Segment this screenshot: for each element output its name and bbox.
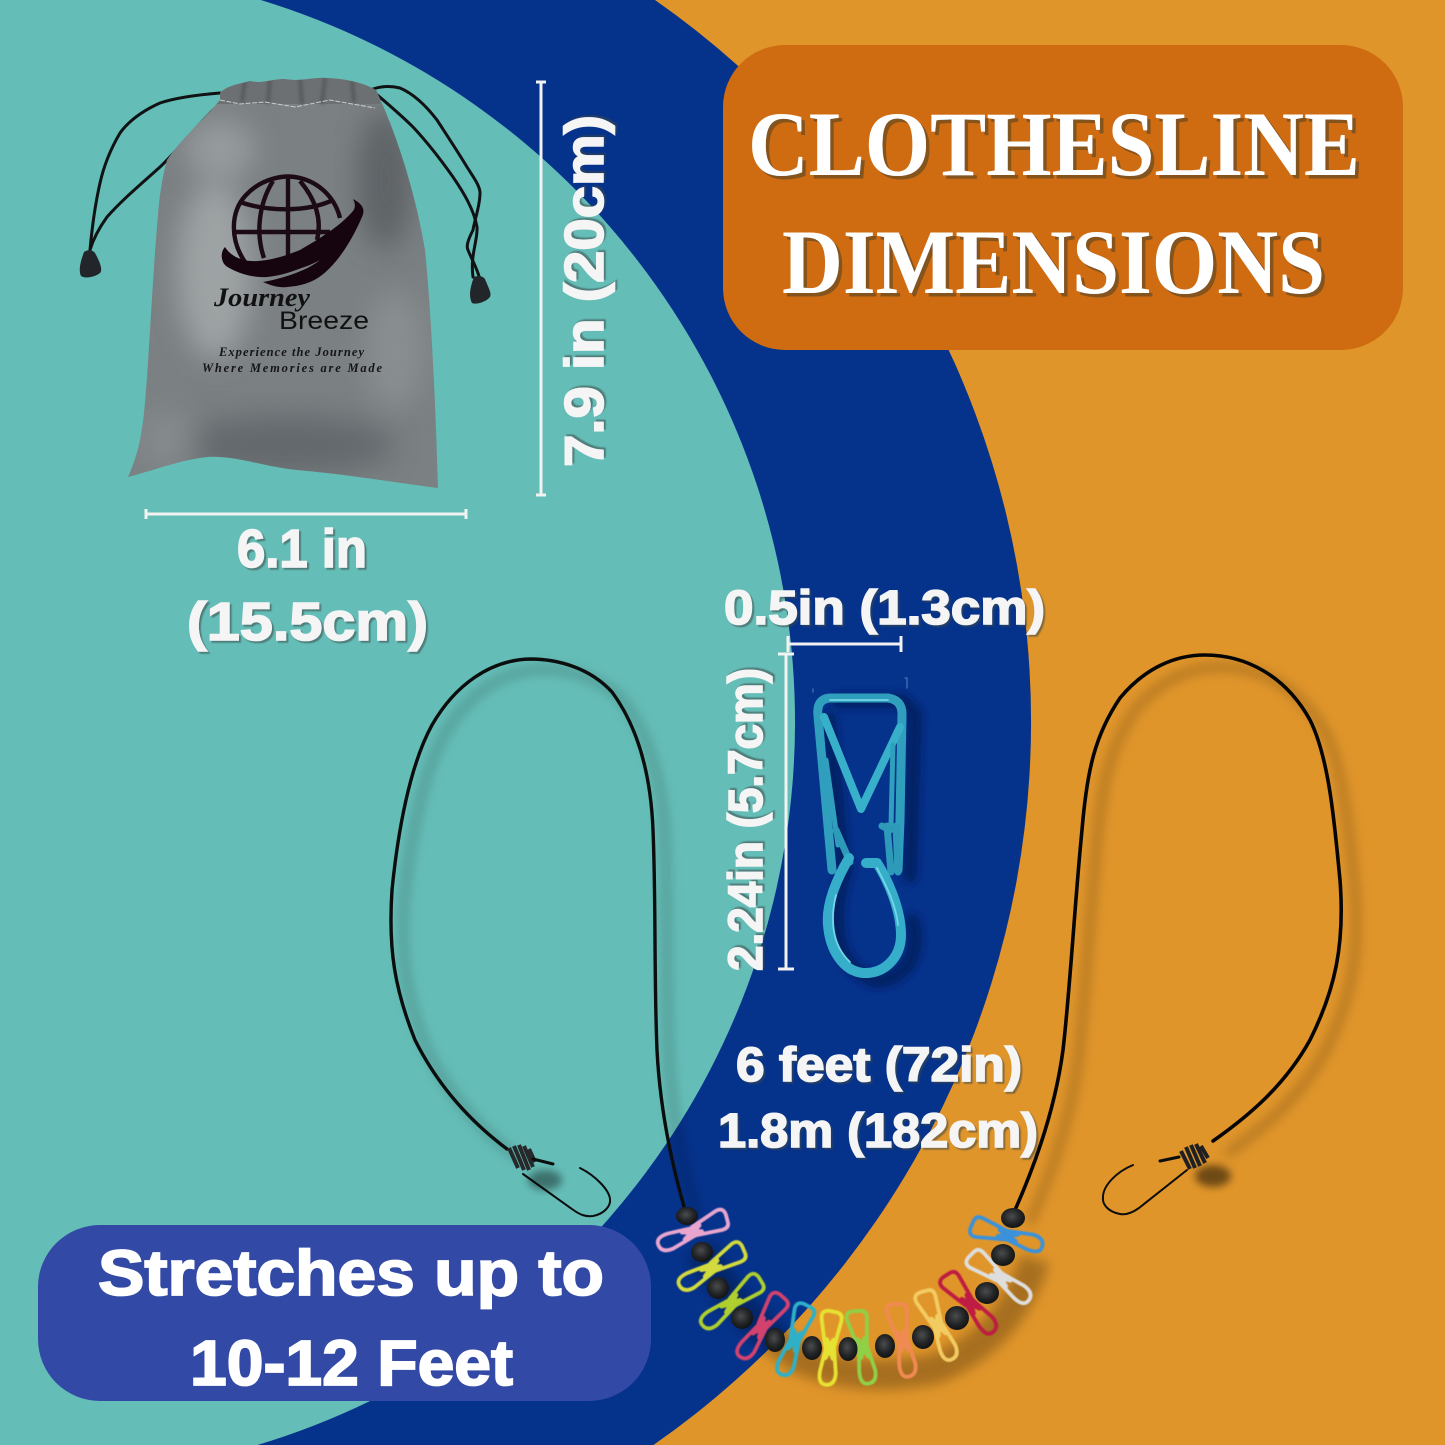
bag stitching: [220, 100, 375, 108]
bag width metric: (15.5cm): [187, 592, 428, 652]
clothespin string: [655, 1207, 1045, 1386]
bag height label: 7.9 in (20cm): [553, 115, 615, 467]
bag drawstrings: [90, 87, 480, 280]
clothespin spring: [836, 826, 898, 872]
clip height dimension bar: [778, 654, 794, 969]
title line 2: DIMENSIONS: [782, 211, 1325, 313]
right knot shadow: [1195, 1165, 1231, 1187]
bag toggle right: [470, 276, 491, 304]
cord length label: [718, 1039, 1038, 1158]
right cord: [1015, 655, 1356, 1222]
clothespin highlight: [830, 700, 898, 962]
bag height dimension bar: [536, 81, 546, 495]
left knot shadow: [528, 1170, 562, 1190]
clothespin lower loop: [828, 858, 901, 973]
stretch callout: [38, 1225, 651, 1401]
bag width label: [187, 519, 428, 652]
clothespin: blue: [968, 1215, 1045, 1256]
drawstring bag: [80, 70, 491, 495]
right cord tail: [1160, 1157, 1179, 1161]
clothespin: orange: [886, 1302, 918, 1378]
clothespin: yellow: [816, 1310, 842, 1386]
right knot: [1181, 1144, 1208, 1169]
globe swoosh: [222, 199, 363, 287]
clothespin upper loop: [818, 698, 902, 870]
cord length label: 6 feet (72in): [736, 1039, 1022, 1092]
clip width dimension bar: [788, 636, 901, 652]
bag toggle left: [80, 250, 101, 277]
clothespin: lime 1: [674, 1240, 749, 1294]
clothespin: pale yellow: [913, 1287, 961, 1363]
stretch text line 2: 10-12 Feet: [190, 1327, 513, 1399]
right hook: [1103, 1165, 1187, 1214]
title line 1: CLOTHESLINE: [748, 93, 1360, 195]
bag tagline 1: Experience the Journey: [218, 345, 364, 359]
small clothespins: [655, 1208, 1045, 1386]
clothespin: crimson: [938, 1269, 1001, 1338]
clothespin side arms: [826, 745, 893, 845]
clothespin: teal: [772, 1301, 816, 1378]
clothespin: white: [964, 1247, 1035, 1309]
clothespin stray marks: [813, 678, 907, 692]
bag width dimension bar: [146, 509, 466, 519]
clothespin shadow: [829, 701, 915, 981]
left knot: [509, 1145, 535, 1170]
cord length metric: 1.8m (182cm): [718, 1105, 1038, 1158]
background: teal arc: [0, 0, 795, 1445]
clip width label: 0.5in (1.3cm): [724, 582, 1045, 635]
clothespin shadows: [700, 1249, 1035, 1375]
bag width label: 6.1 in: [237, 519, 367, 579]
clothespin: rose: [732, 1290, 791, 1363]
left cord tail: [533, 1159, 553, 1164]
clothespin: lime 2: [696, 1271, 767, 1333]
left cord: [391, 659, 697, 1220]
stretch text line 1: Stretches up to: [98, 1237, 604, 1309]
title panel: [723, 45, 1403, 350]
left hook: [523, 1168, 610, 1216]
bag body: [120, 70, 450, 495]
bag logo text: Journey: Journey: [213, 283, 310, 312]
large clothespin: [813, 678, 915, 981]
clothespin inner arms: [824, 717, 900, 809]
globe logo: [234, 177, 340, 262]
clothespin: pink: [655, 1208, 731, 1254]
background: blue arc: [0, 0, 1031, 1445]
clip height label: 2.24in (5.7cm): [720, 668, 773, 971]
clothespin: green: [846, 1309, 878, 1385]
bag logo text: Breeze: Breeze: [279, 307, 369, 335]
bag tagline 2: Where Memories are Made: [202, 361, 382, 375]
string beads: [676, 1207, 1025, 1361]
